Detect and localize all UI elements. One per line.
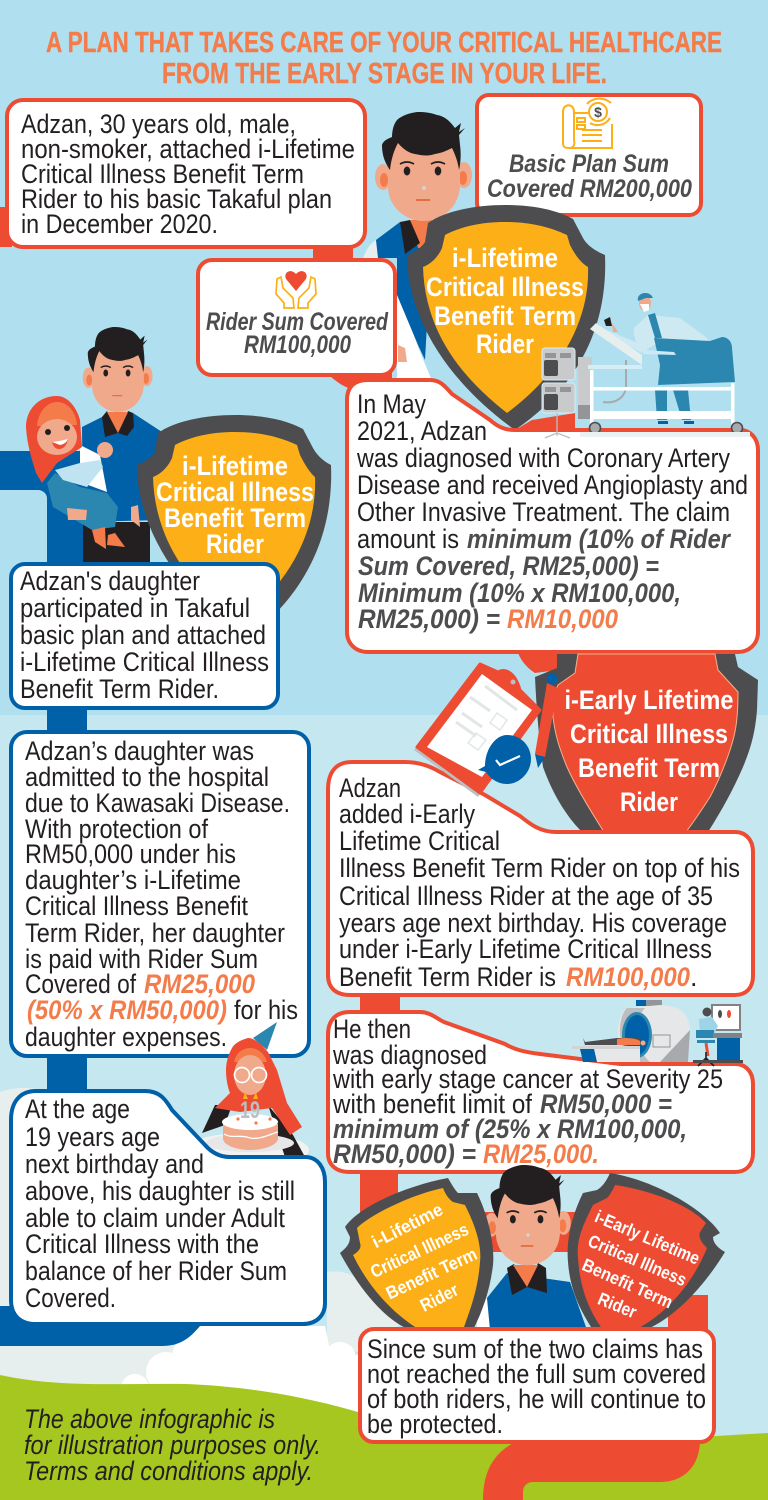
right shield: i-Early Lifetime: Rider	[595, 1289, 640, 1322]
panel: Adzan intro	[7, 100, 365, 247]
cancer claim text	[332, 1014, 723, 1169]
cancer claim text: was diagnosed	[332, 1040, 487, 1070]
shield: i-Lifetime, daughter	[137, 415, 331, 640]
intro text: Rider to his basic Takaful plan	[21, 184, 332, 214]
left shield: i-Lifetime	[340, 1178, 493, 1330]
head	[484, 1165, 571, 1265]
body	[477, 1263, 587, 1330]
Kawasaki text: Covered of	[25, 969, 136, 999]
shield: i-Early Lifetime: Critical Illness	[570, 719, 728, 749]
red timeline connectors	[0, 207, 708, 1500]
left shield: i-Lifetime: Rider	[417, 1280, 462, 1316]
title: FROM THE EARLY STAGE IN YOUR LIFE.	[162, 58, 607, 90]
illustration: clipboard, pen and check bubble	[414, 664, 558, 797]
panel: continued protection	[360, 1329, 714, 1442]
Kawasaki text: Adzan’s daughter was	[25, 736, 254, 766]
cancer claim text: He then	[333, 1014, 411, 1044]
illustration: grown daughter with birthday cake: 19	[240, 1097, 260, 1124]
icon: heart in hands	[276, 271, 316, 308]
body	[82, 411, 162, 564]
adult claim text: Critical Illness with the	[25, 1229, 259, 1259]
i-Early text: Benefit Term Rider is	[339, 962, 556, 992]
left shield: i-Lifetime: Benefit Term	[383, 1244, 480, 1303]
claim text: 2021, Adzan	[357, 416, 487, 446]
rider sum caption: Rider Sum Covered	[206, 308, 389, 336]
claim text: Minimum (10% x RM100,000,	[358, 578, 681, 608]
head	[83, 327, 153, 412]
cancer claim text: RM25,000.	[483, 1139, 599, 1169]
adult claim text: At the age	[25, 1094, 130, 1124]
right shield: i-Early Lifetime: Benefit Term	[579, 1255, 676, 1312]
protection text: be protected.	[367, 1409, 503, 1439]
illustration: hospital bed scene	[542, 293, 750, 438]
left shield: i-Lifetime: i-Lifetime	[368, 1199, 446, 1252]
Kawasaki text: (50% x RM50,000)	[27, 995, 227, 1025]
Kawasaki text: With protection of	[25, 814, 208, 844]
disclaimer: Terms and conditions apply.	[24, 1456, 313, 1486]
illustration: Adzan with daughter	[26, 327, 162, 564]
panel: daughter participation	[11, 564, 278, 708]
i-Early text: Lifetime Critical	[339, 826, 500, 856]
panel: adult critical illness claim	[11, 1091, 325, 1324]
daughter	[26, 396, 140, 549]
adult claim text: above, his daughter is still	[25, 1176, 295, 1206]
participation text: Adzan's daughter	[20, 566, 200, 596]
adult claim text: able to claim under Adult	[25, 1203, 285, 1233]
icon: policy scroll with dollar: $	[594, 104, 602, 120]
cancer claim text: RM50,000 =	[540, 1089, 672, 1119]
shield: i-Lifetime, daughter: Rider	[206, 529, 264, 559]
shield: i-Lifetime, daughter: i-Lifetime	[182, 451, 288, 481]
panel: Kawasaki Disease claim	[11, 732, 309, 1056]
protection text	[367, 1334, 706, 1439]
disclaimer	[24, 1404, 321, 1486]
participation text	[20, 566, 269, 704]
i-Early text	[339, 773, 740, 992]
protection text: Since sum of the two claims has	[367, 1334, 703, 1364]
adult claim text: 19 years age	[25, 1122, 160, 1152]
adult claim text	[25, 1094, 295, 1313]
adult claim text: next birthday and	[25, 1149, 204, 1179]
i-Early text: added i-Early	[339, 799, 475, 829]
claim text	[356, 389, 748, 634]
claim text: In May	[357, 389, 426, 419]
icon: policy scroll with dollar	[563, 99, 612, 148]
blue timeline connectors	[0, 451, 200, 1346]
shield: i-Early Lifetime: Benefit Term	[578, 753, 720, 783]
Kawasaki text: due to Kawasaki Disease.	[25, 788, 290, 818]
i-Early text: under i-Early Lifetime Critical Illness	[339, 934, 712, 964]
shield: i-Lifetime, daughter: Critical Illness	[156, 477, 314, 507]
intro text: in December 2020.	[21, 209, 218, 239]
claim text: amount is	[357, 524, 459, 554]
right shield: i-Early Lifetime: i-Early Lifetime	[592, 1206, 703, 1269]
shield: i-Lifetime, Adzan	[407, 205, 605, 430]
rider sum caption: RM100,000	[244, 331, 351, 359]
cancer claim text: with benefit limit of	[332, 1089, 532, 1119]
i-Early text: RM100,000	[566, 962, 690, 992]
intro text: Adzan, 30 years old, male,	[21, 109, 296, 139]
shield: i-Lifetime, daughter: Benefit Term	[164, 503, 306, 533]
intro text: non-smoker, attached i-Lifetime	[21, 134, 355, 164]
claim text: Sum Covered, RM25,000) =	[358, 551, 659, 581]
claim text: RM25,000) =	[358, 604, 500, 634]
Kawasaki text: RM50,000 under his	[25, 839, 236, 869]
Kawasaki text: daughter expenses.	[25, 1022, 227, 1052]
right shield: i-Early Lifetime	[568, 1173, 725, 1330]
adult claim text: balance of her Rider Sum	[25, 1256, 287, 1286]
participation text: Benefit Term Rider.	[20, 674, 219, 704]
Kawasaki text: Term Rider, her daughter	[25, 918, 285, 948]
rider sum caption	[206, 308, 389, 359]
claim text: RM10,000	[507, 604, 618, 634]
intro text: Critical Illness Benefit Term	[21, 159, 304, 189]
i-Early text: Critical Illness Rider at the age of 35	[339, 881, 713, 911]
participation text: basic plan and attached	[20, 620, 266, 650]
head	[375, 112, 472, 221]
panel: Coronary Artery Disease claim	[347, 380, 758, 652]
basic plan caption: Basic Plan Sum	[509, 150, 669, 178]
intro text	[21, 109, 355, 239]
illustration: Adzan between two shields	[340, 1165, 725, 1330]
disclaimer: The above infographic is	[24, 1404, 275, 1434]
cancer claim text: RM50,000) =	[333, 1139, 476, 1169]
i-Early text: .	[690, 962, 698, 992]
disclaimer: for illustration purposes only.	[24, 1430, 321, 1460]
adult claim text: Covered.	[25, 1283, 116, 1313]
left shield: i-Lifetime: Critical Illness	[367, 1219, 472, 1282]
panel: early stage cancer claim	[328, 1012, 753, 1172]
Kawasaki text: daughter’s i-Lifetime	[25, 865, 241, 895]
illustration: MRI scanner	[572, 1000, 743, 1066]
Kawasaki text: RM25,000	[144, 969, 255, 999]
protection text: not reached the full sum covered	[367, 1359, 706, 1389]
basic plan caption	[487, 150, 692, 203]
participation text: participated in Takaful	[20, 593, 250, 623]
Kawasaki text: admitted to the hospital	[25, 762, 269, 792]
Kawasaki text	[25, 736, 298, 1052]
participation text: i-Lifetime Critical Illness	[20, 647, 269, 677]
man figure with basic plan shield	[362, 112, 472, 400]
shield: i-Lifetime, Adzan: i-Lifetime	[452, 243, 558, 273]
shield: i-Early Lifetime: Rider	[620, 787, 678, 817]
shield: i-Lifetime, Adzan: Rider	[476, 329, 534, 359]
right shield: i-Early Lifetime: Critical Illness	[585, 1231, 690, 1290]
shield: i-Early Lifetime	[535, 654, 758, 832]
Kawasaki text: for his	[234, 995, 298, 1025]
title	[46, 27, 722, 90]
Kawasaki text: Critical Illness Benefit	[25, 891, 248, 921]
cancer claim text: minimum of (25% x RM100,000,	[333, 1114, 687, 1144]
shield: i-Lifetime, Adzan: Critical Illness	[426, 272, 584, 302]
claim text: minimum (10% of Rider	[467, 524, 731, 554]
protection text: of both riders, he will continue to	[367, 1384, 706, 1414]
panel: i-Early rider added	[328, 762, 753, 995]
panel: rider sum covered	[198, 260, 395, 375]
shield: i-Lifetime, Adzan: Benefit Term	[434, 301, 576, 331]
illustration: grown daughter with birthday cake	[185, 1022, 309, 1167]
Kawasaki text: is paid with Rider Sum	[25, 944, 258, 974]
shield: i-Early Lifetime: i-Early Lifetime	[564, 685, 734, 715]
panel: basic plan sum covered	[477, 95, 701, 215]
body	[362, 220, 440, 400]
basic plan caption: Covered RM200,000	[487, 175, 692, 203]
i-Early text: Adzan	[339, 773, 401, 803]
